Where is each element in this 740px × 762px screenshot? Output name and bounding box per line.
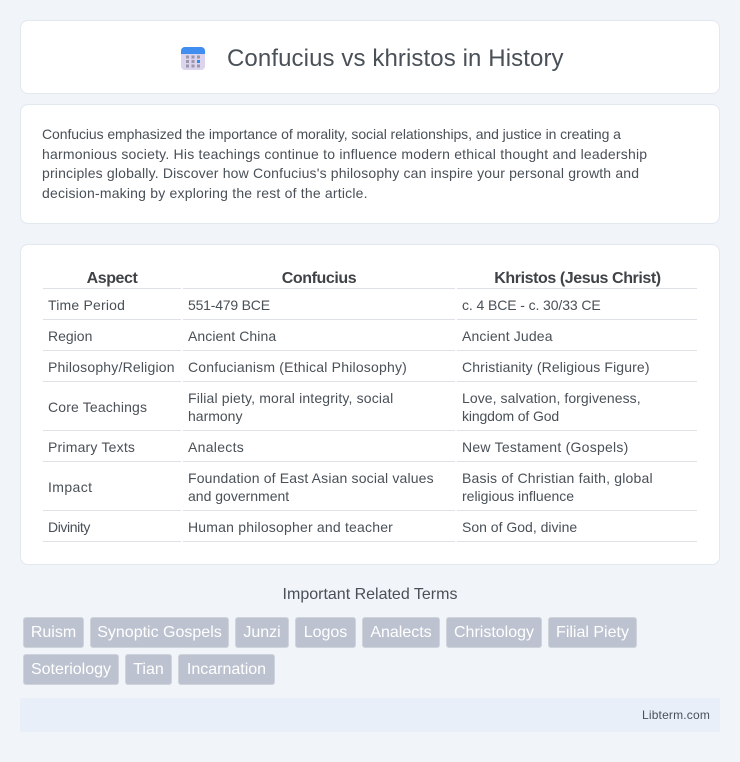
tag: Ruism: Ruism [31, 624, 76, 641]
row: philosophy/religion: Christianity (Religious Figure) [462, 359, 650, 375]
tag: Synoptic Gospels [90, 617, 229, 648]
row: philosophy/religion: Philosophy/Religion [48, 359, 175, 375]
row: philosophy/religion: Confucianism (Ethical Philosophy) [188, 359, 407, 375]
row: divinity [48, 519, 577, 535]
related terms tags [23, 617, 637, 685]
row: time period [48, 297, 601, 313]
tag: Logos: Logos [304, 624, 347, 641]
tag: Analects: Analects [370, 624, 432, 641]
comparison table panel [20, 244, 720, 565]
row: primary texts: Analects [188, 439, 244, 455]
header panel [20, 20, 720, 94]
row: region: Ancient Judea [462, 328, 553, 344]
table header row: Khristos (Jesus Christ) [494, 270, 661, 287]
tag: Christology: Christology [454, 624, 534, 641]
row: impact: religious influence [462, 488, 574, 504]
row: divinity: Human philosopher and teacher [188, 519, 393, 535]
row: region: Ancient China [188, 328, 276, 344]
tag: Incarnation [178, 654, 275, 685]
tag: Christology [446, 617, 542, 648]
tag: Soteriology [23, 654, 119, 685]
row: core teachings: harmony [188, 408, 242, 424]
tag: Junzi: Junzi [243, 624, 281, 641]
row: primary texts [48, 439, 629, 455]
comparison table [43, 270, 697, 542]
related terms heading: Important Related Terms [283, 586, 457, 603]
row: impact: Impact [48, 479, 92, 495]
tag: Logos [295, 617, 356, 648]
row: impact: Foundation of East Asian social values [188, 470, 434, 486]
title: Confucius vs khristos in History [227, 45, 564, 72]
footer credit: Libterm.com [642, 708, 710, 722]
icon: calendar [181, 47, 205, 70]
tag: Junzi [235, 617, 289, 648]
tag: Incarnation: Incarnation [187, 661, 266, 678]
tag: Tian [125, 654, 172, 685]
table header row [87, 270, 661, 287]
intro text [42, 126, 647, 201]
row: time period: c. 4 BCE - c. 30/33 CE [462, 297, 601, 313]
intro panel [20, 104, 720, 224]
footer bar [20, 698, 720, 732]
intro text: principles globally. Discover how Confucius's philosophy can inspire your personal growth and [42, 165, 639, 181]
table header row: Aspect [87, 270, 137, 287]
tag: Filial Piety [548, 617, 637, 648]
row: impact: and government [188, 488, 289, 504]
tag: Ruism [23, 617, 84, 648]
row: divinity: Divinity [48, 519, 90, 535]
row: core teachings [48, 390, 641, 424]
intro text: harmonious society. His teachings continue to influence modern ethical thought and leadership [42, 146, 647, 162]
row: time period: Time Period [48, 297, 125, 313]
tag: Soteriology: Soteriology [31, 661, 111, 678]
row: core teachings: kingdom of God [462, 408, 559, 424]
row: time period: 551-479 BCE [188, 297, 270, 313]
row: divinity: Son of God, divine [462, 519, 577, 535]
tag: Synoptic Gospels: Synoptic Gospels [97, 624, 222, 641]
tag: Filial Piety: Filial Piety [556, 624, 629, 641]
row: core teachings: Filial piety, moral integrity, social [188, 390, 393, 406]
row: impact: Basis of Christian faith, global [462, 470, 653, 486]
row: region: Region [48, 328, 92, 344]
row: core teachings: Love, salvation, forgiveness, [462, 390, 641, 406]
tag: Tian: Tian [133, 661, 164, 678]
row: philosophy/religion [48, 359, 650, 375]
row: core teachings: Core Teachings [48, 399, 147, 415]
row: impact [48, 470, 653, 504]
table header row: Confucius [282, 270, 356, 287]
row: primary texts: Primary Texts [48, 439, 135, 455]
intro text: Confucius emphasized the importance of morality, social relationships, and justice in creating a [42, 126, 621, 142]
row: region [48, 328, 553, 344]
intro text: decision-making by exploring the rest of the article. [42, 184, 368, 200]
tag: Analects [362, 617, 440, 648]
row: primary texts: New Testament (Gospels) [462, 439, 629, 455]
